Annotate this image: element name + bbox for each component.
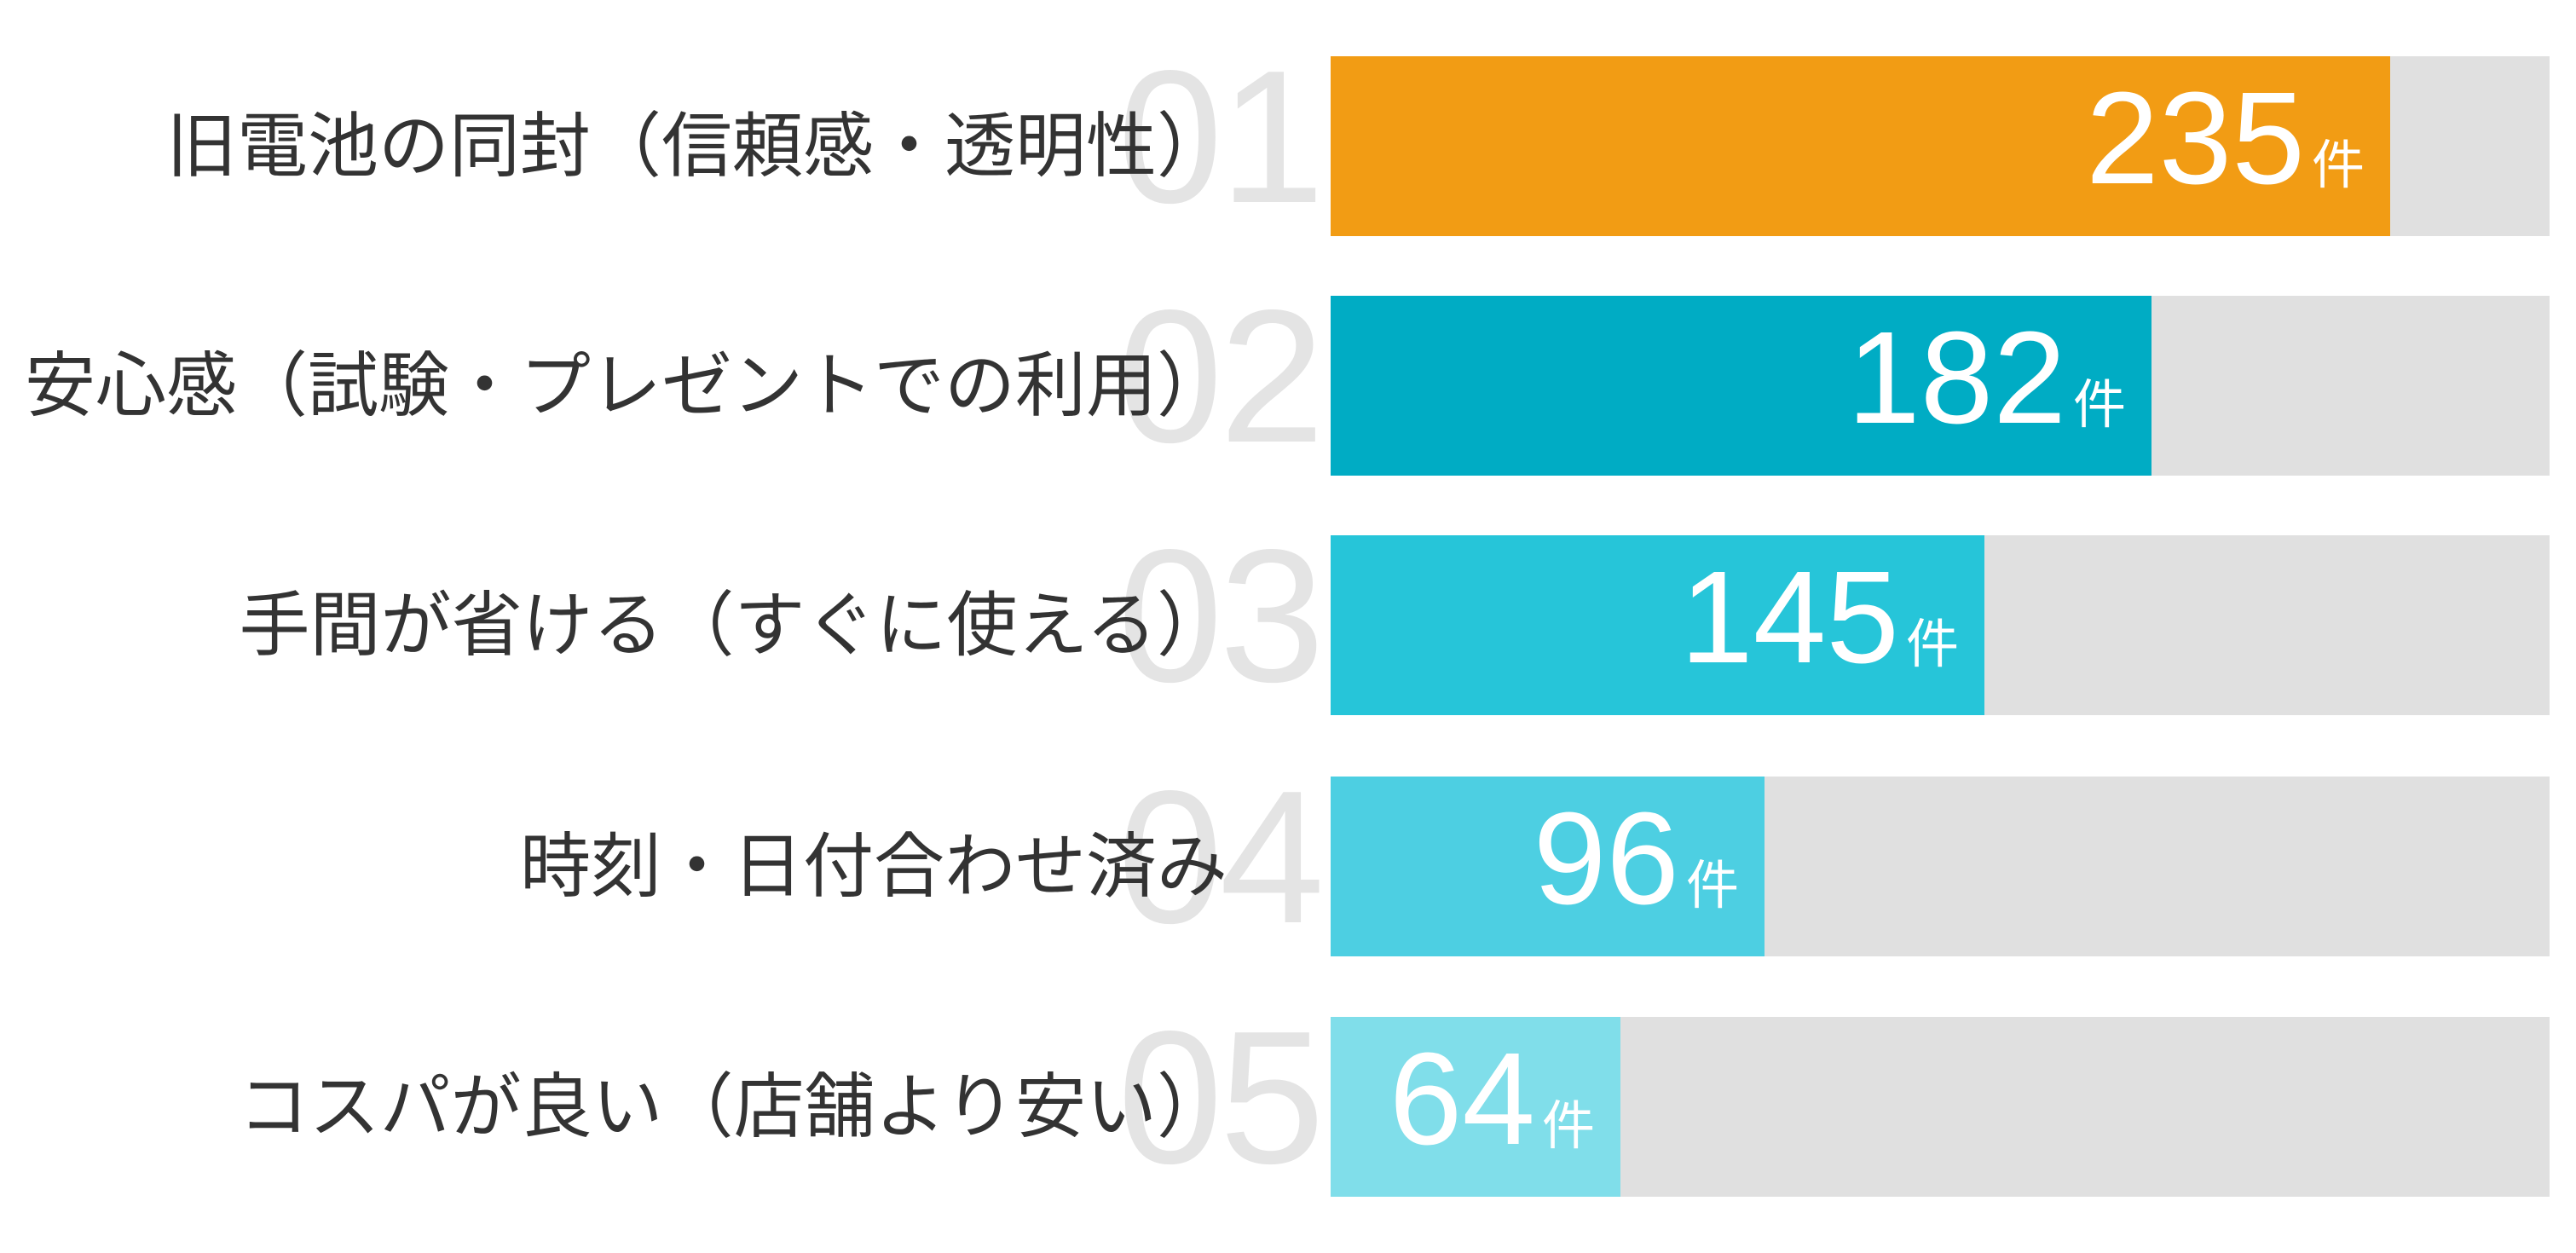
- ghost number 05: 05: [1118, 992, 1321, 1204]
- row 2: [25, 271, 2550, 482]
- bar 5: [1331, 1017, 2550, 1197]
- row 4: [520, 752, 2550, 963]
- bar 1: 235件: [2086, 65, 2365, 211]
- label 3: 手間が省ける（すぐに使える）: [239, 586, 1227, 665]
- row 5: [239, 992, 2550, 1204]
- label 1: 旧電池の同封（信頼感・透明性）: [166, 107, 1227, 186]
- label 5: コスパが良い（店舗より安い）: [239, 1067, 1227, 1146]
- bar 5: 64件: [1389, 1025, 1595, 1172]
- bar 3: [1331, 535, 2550, 715]
- ghost number 02: 02: [1118, 271, 1321, 482]
- row 1: [166, 32, 2550, 243]
- bar 2: 182件: [1847, 304, 2126, 451]
- ghost number 03: 03: [1118, 511, 1321, 722]
- label 4: 時刻・日付合わせ済み: [520, 827, 1227, 906]
- label 2: 安心感（試験・プレゼントでの利用）: [25, 346, 1227, 425]
- bar 3: 145件: [1680, 544, 1959, 690]
- row 3: [239, 511, 2550, 722]
- bar 1: [1331, 56, 2550, 236]
- ghost number 01: 01: [1118, 32, 1321, 243]
- bar 4: [1331, 777, 2550, 956]
- bar 2: [1331, 296, 2550, 476]
- bar 4: 96件: [1533, 785, 1739, 932]
- ghost number 04: 04: [1118, 752, 1321, 963]
